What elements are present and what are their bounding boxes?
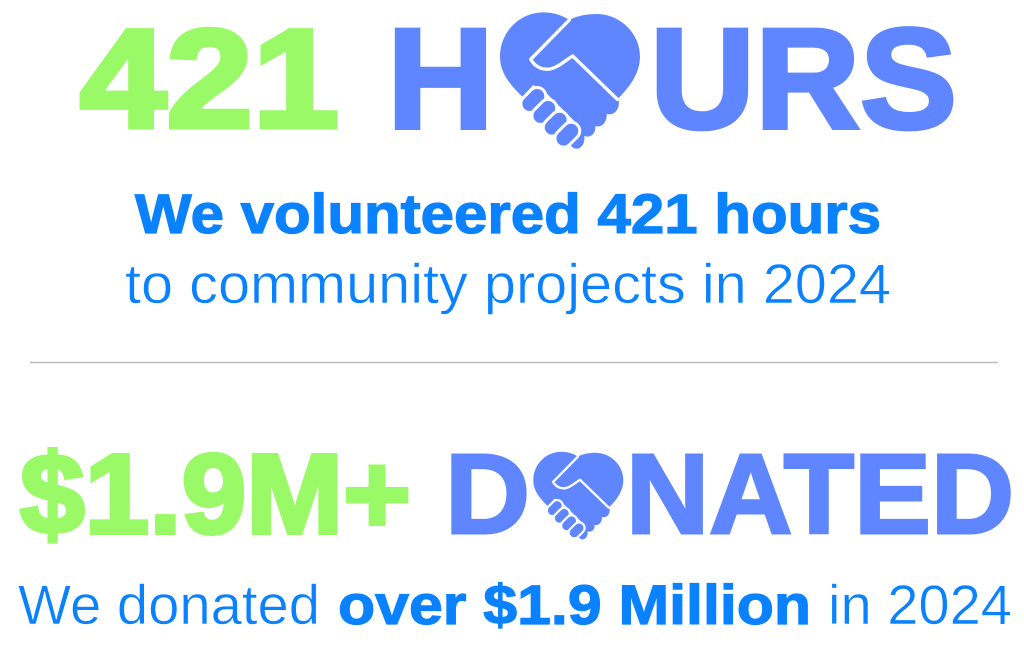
number: $1.9M+: $1.9M+	[20, 431, 411, 557]
bold amount: over $1.9 Million	[338, 573, 811, 636]
light line: to community projects in 2024	[125, 252, 891, 315]
text block: volunteering summary	[125, 182, 891, 315]
icon: handshake heart	[500, 12, 640, 151]
light text start: We donated	[18, 573, 320, 636]
headline: 421 hours	[80, 0, 957, 159]
bold line: We volunteered 421 hours	[135, 182, 881, 245]
light text end: in 2024	[828, 573, 1012, 636]
text block: donation summary	[18, 573, 1012, 636]
word part: URS: URS	[650, 0, 957, 159]
word part: NATED: NATED	[626, 431, 1014, 557]
word part: H: H	[387, 0, 494, 159]
icon: handshake heart small	[533, 452, 623, 541]
headline: $1.9M+ donated	[20, 431, 1014, 557]
word part: D: D	[445, 431, 530, 557]
number: 421: 421	[80, 0, 339, 157]
